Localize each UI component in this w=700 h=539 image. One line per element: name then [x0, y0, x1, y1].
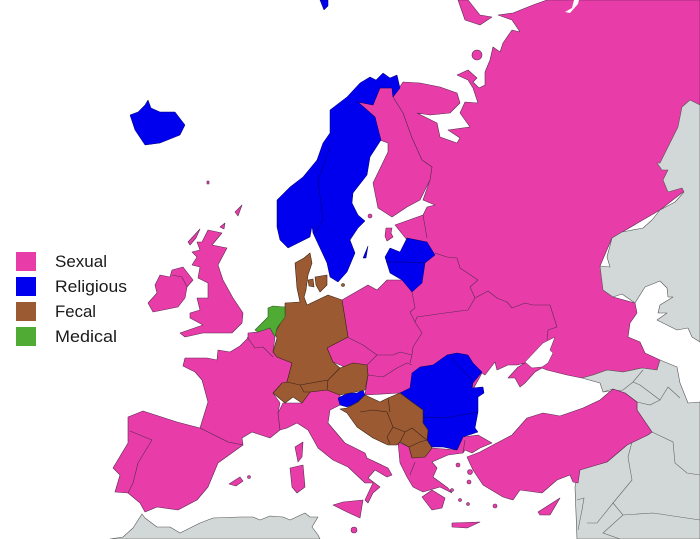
region: Fecal, Western Balkans — [340, 393, 432, 458]
Sea of Azov — [525, 337, 555, 368]
legend item: Medical: Medical — [55, 327, 117, 346]
grey land: Caucasus and Middle East — [575, 360, 700, 539]
legend item: Religious: Religious — [55, 277, 127, 296]
region: Religious, Latvia and Lithuania — [385, 238, 435, 292]
legend item: Sexual: Sexual — [55, 252, 107, 271]
background grey land: North Africa — [110, 513, 320, 539]
region: Sexual, Novaya Zemlya and Kolguev — [458, 0, 492, 60]
region: Sexual, United Kingdom and Ireland — [148, 181, 243, 337]
region: Religious, Slovenia — [338, 390, 365, 407]
region: Religious, Norway and Sweden — [277, 73, 400, 282]
legend — [16, 252, 127, 346]
region: Sexual, Russia and Eastern Europe — [327, 0, 700, 400]
legend item: Fecal: Fecal — [55, 302, 96, 321]
region: Sexual, Estonian islands — [385, 228, 393, 241]
region: Sexual, France and Belgium — [183, 328, 292, 445]
grey land: Central Asia — [600, 100, 700, 342]
region: Sexual, Finland and Aland — [358, 88, 432, 218]
region: Sexual, Spain and Portugal — [113, 411, 243, 512]
Ob gulf — [565, 0, 579, 13]
region: Sexual, Italy and islands — [229, 390, 392, 533]
region: Medical, Netherlands — [255, 306, 285, 337]
region: Sexual, Albania, Greece and Thrace — [398, 435, 497, 528]
region: Fecal, Germany, Denmark, Austria and Switzerland — [273, 253, 368, 403]
region: Sexual, Turkey and Cyprus — [467, 389, 652, 515]
region: Religious, Iceland and Svalbard — [130, 0, 328, 145]
Belgium border — [247, 337, 273, 357]
country borders — [347, 215, 557, 377]
region: Religious, Romania, Moldova and Bulgaria — [400, 353, 484, 450]
